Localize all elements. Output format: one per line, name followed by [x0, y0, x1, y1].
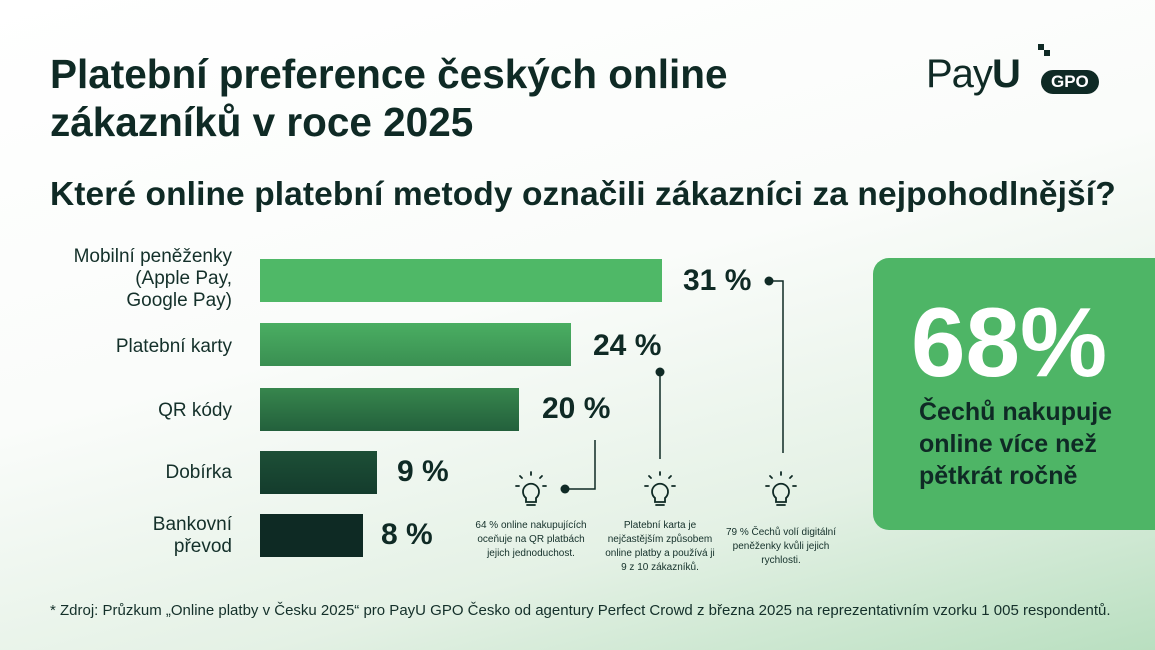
panel: stat: 68%	[911, 287, 1107, 397]
bar chart: Google Pay)	[126, 290, 232, 311]
bar chart	[74, 246, 751, 557]
text: Platební karta je nejčastějším způsobem online platby a používá ji 9 z 10 zákazníků.	[605, 520, 715, 573]
bar chart: QR kódy	[158, 400, 232, 421]
title: Platební preference českých online	[50, 51, 728, 97]
logo: PayU	[926, 52, 1020, 96]
subtitle: Které online platební metody označili zákazníci za nejpohodlnější?	[50, 176, 1116, 213]
panel: stat: pětkrát ročně	[919, 462, 1077, 490]
title	[50, 51, 728, 145]
bar chart: 20 %	[542, 392, 610, 425]
bar chart: Bankovní	[153, 514, 232, 535]
bar chart: 8 %	[381, 518, 433, 551]
panel: stat	[873, 258, 1155, 530]
bar chart: Dobírka	[165, 462, 232, 483]
footnote: * Zdroj: Průzkum „Online platby v Česku 2025“ pro PayU GPO Česko od agentury Perfect Crowd z března 2025 na reprezentativním vzorku 1 005 respondentů.	[50, 602, 1111, 619]
bar chart: převod	[174, 536, 232, 557]
panel: stat: online více než	[919, 430, 1097, 458]
bar chart: Platební karty	[116, 336, 232, 357]
panel: stat: Čechů nakupuje	[919, 398, 1112, 426]
bar chart: (Apple Pay,	[135, 268, 232, 289]
text: 79 % Čechů volí digitální peněženky kvůli jejich rychlosti.	[726, 527, 836, 566]
bar chart: 31 %	[683, 264, 751, 297]
notes: 64 % online nakupujících oceňuje na QR platbách jejich jednoduchost.	[475, 520, 587, 559]
bar chart: 9 %	[397, 455, 449, 488]
logo	[926, 44, 1099, 96]
logo: GPO	[1051, 72, 1089, 91]
bar chart: 24 %	[593, 329, 661, 362]
bar chart: Mobilní peněženky	[74, 246, 232, 267]
title: zákazníků v roce 2025	[50, 99, 473, 145]
